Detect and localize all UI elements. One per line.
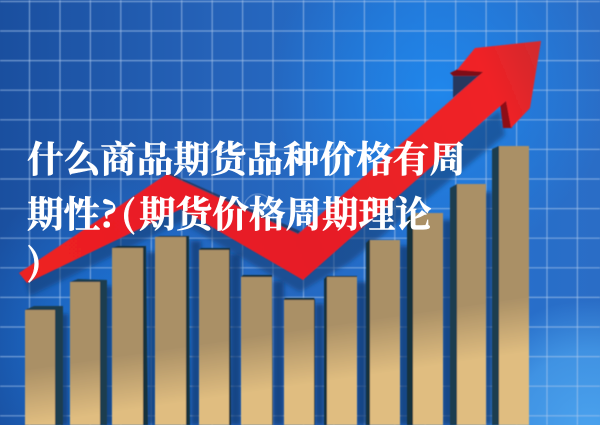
title line 3: ): [27, 234, 42, 286]
title line 2: 期性?(期货价格周期理论: [27, 186, 432, 238]
bar 2: [70, 279, 107, 425]
bar 4: [155, 236, 190, 425]
bar 10: [407, 213, 443, 425]
title line 1: 什么商品期货品种价格有周: [27, 131, 466, 183]
arrow right barb underside: [500, 101, 512, 128]
bar 7: [284, 298, 315, 425]
bar 3: [112, 246, 148, 425]
bar 5: [199, 248, 231, 425]
arrow left barb underside: [453, 76, 480, 98]
faint round watermark: [244, 194, 272, 222]
bar 11: [450, 184, 486, 425]
arrow body: [19, 41, 541, 283]
bar chart: [25, 146, 529, 425]
bar 8: [324, 276, 357, 425]
arrow shadow: [25, 110, 505, 296]
red arrow: [19, 41, 541, 283]
bar 12: [492, 146, 529, 425]
bar 1: [25, 306, 63, 425]
bar 9: [366, 240, 400, 425]
arrow peak edge: [167, 172, 300, 235]
bar 6: [241, 275, 273, 425]
bar shadows on the background: [60, 192, 492, 425]
